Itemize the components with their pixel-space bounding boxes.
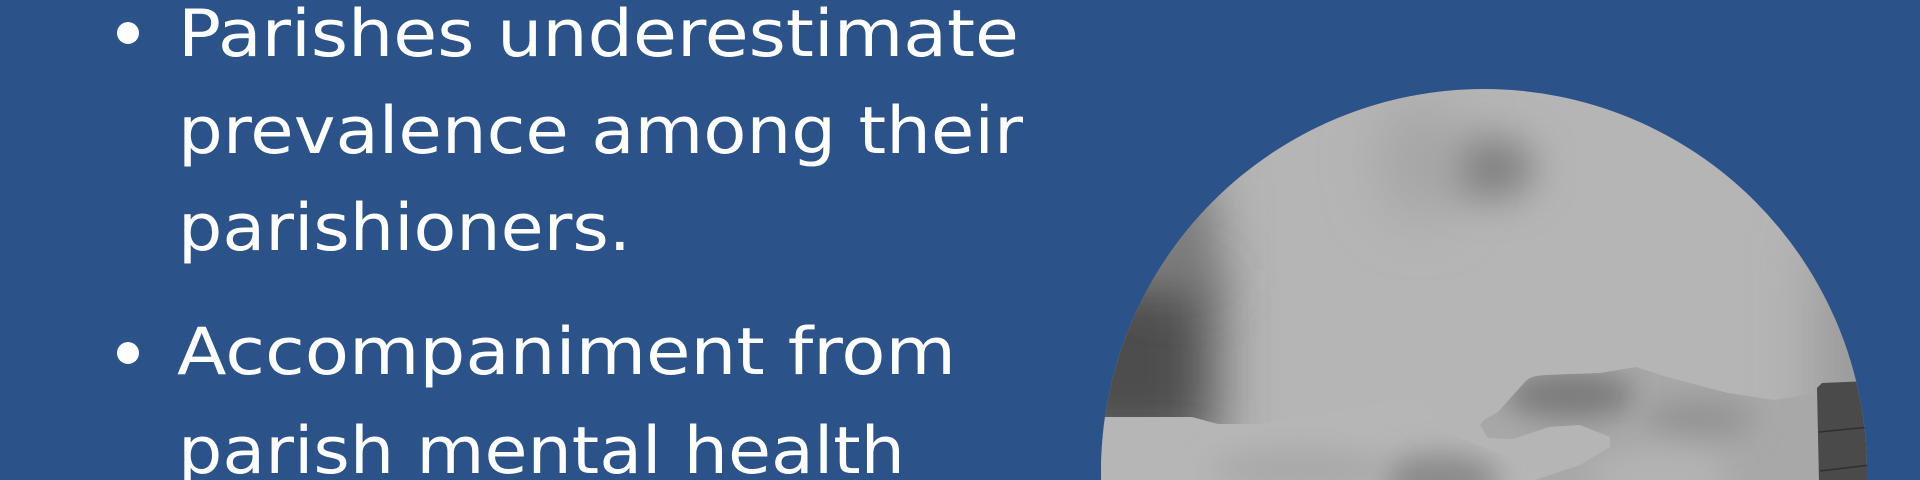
text: first item: [178, 0, 1023, 266]
text: first item: prevalence among their: [178, 94, 1023, 169]
circular photo: two hands reaching: [1101, 89, 1867, 480]
bullet list: [117, 0, 1023, 480]
text: second item: [177, 315, 956, 480]
icon: shirt sleeve: [1817, 381, 1870, 480]
bullet: second item: [117, 342, 139, 364]
icon: right hand: [1480, 367, 1808, 480]
photo backdrop: [1101, 89, 1867, 480]
text: second item: Accompaniment from: [177, 315, 956, 390]
text: first item: parishioners.: [178, 191, 631, 266]
bullet: first item: [117, 22, 139, 44]
icon: left hand: [1101, 417, 1506, 480]
